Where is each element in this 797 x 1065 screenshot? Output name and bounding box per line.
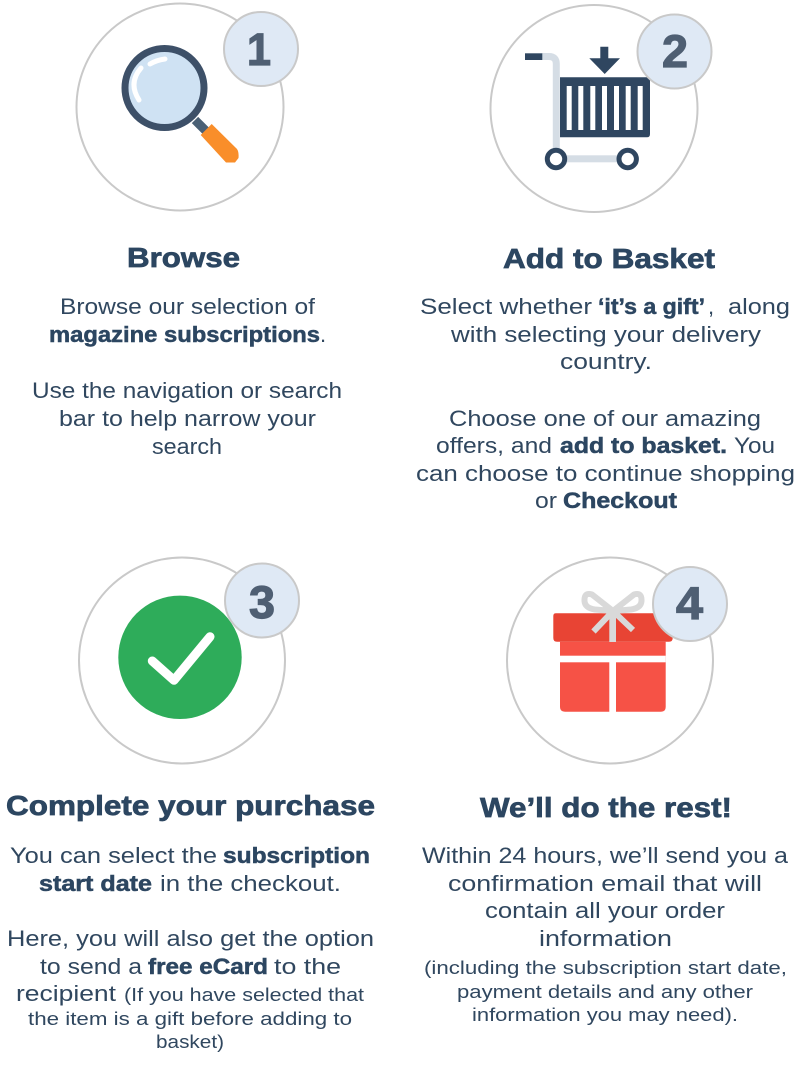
text block: browse description: Use the navigation or search: [32, 378, 342, 403]
text block: purchase description: free eCard: [148, 954, 268, 979]
step 4 circle: [507, 558, 713, 764]
heading: Add to Basket: Add to Basket: [503, 243, 715, 274]
text block: basket description: You: [734, 433, 775, 458]
step 2 circle: [490, 5, 698, 212]
text block: browse description: magazine subscriptions: [49, 322, 320, 347]
step 2 number badge: 2: [662, 26, 688, 77]
panel: step 4 we will do the rest: [422, 558, 789, 1025]
icon: gift box: [553, 594, 673, 712]
text block: final step description: Within 24 hours, we’ll send you a: [422, 843, 789, 868]
text block: purchase description: to send a: [40, 954, 143, 979]
icon: magnifying glass: [125, 48, 239, 162]
text block: purchase description: in the checkout.: [160, 871, 341, 896]
text block: basket description: along: [728, 294, 790, 319]
step 3 number badge: 3: [249, 577, 275, 628]
text block: purchase description: start date: [39, 871, 152, 896]
text block: basket description: ,: [708, 294, 714, 319]
text block: basket description: country.: [560, 349, 652, 374]
text block: purchase description: You can select the: [10, 843, 217, 868]
text block: purchase description: recipient: [16, 981, 116, 1006]
text block: final step description: information you may need).: [472, 1005, 738, 1025]
text block: final step description: confirmation email that will: [448, 871, 762, 896]
text block: purchase description: Here, you will also get the option: [7, 926, 374, 951]
text block: purchase description: subscription: [223, 843, 370, 868]
text block: basket description: Checkout: [563, 488, 678, 513]
text block: purchase description: basket): [156, 1032, 224, 1052]
step 4 number badge: [653, 567, 727, 641]
text block: browse description: .: [320, 322, 326, 347]
text block: browse description: bar to help narrow your: [59, 406, 316, 431]
text block: basket description: or: [535, 488, 557, 513]
heading: Complete your purchase: Complete your purchase: [6, 790, 375, 821]
step 1 circle: [76, 4, 284, 210]
step 1 number badge: [224, 12, 298, 86]
heading: Browse: Browse: [127, 242, 240, 273]
panel: step 2 add to basket: [416, 5, 795, 513]
text block: browse description: Browse our selection of: [60, 294, 316, 319]
text block: purchase description: [7, 843, 374, 1052]
step 3 number badge: [225, 564, 299, 638]
text block: basket description: with selecting your delivery: [450, 322, 761, 347]
text block: basket description: offers, and: [436, 433, 552, 458]
step 2 number badge: [638, 14, 712, 88]
text block: purchase description: (If you have selected that: [124, 985, 364, 1005]
text block: basket description: ‘it’s a gift’: [598, 294, 705, 319]
text block: browse description: [32, 294, 342, 459]
text block: final step description: [422, 843, 789, 1025]
text block: basket description: Select whether: [420, 294, 592, 319]
text block: final step description: contain all your order: [485, 898, 725, 923]
step 1 number badge: 1: [247, 24, 271, 75]
panel: step 3 complete your purchase: [6, 558, 375, 1052]
heading: We'll do the rest!: We’ll do the rest!: [480, 792, 732, 823]
text block: basket description: add to basket.: [560, 433, 727, 458]
text block: final step description: information: [539, 926, 672, 951]
text block: purchase description: the item is a gift before adding to: [28, 1009, 352, 1029]
panel: step 1 browse: [32, 4, 342, 459]
text block: basket description: can choose to continue shopping: [416, 461, 795, 486]
step 4 number badge: 4: [676, 578, 703, 629]
text block: final step description: (including the subscription start date,: [424, 958, 787, 978]
icon: green check mark: [118, 596, 242, 719]
step 3 circle: [79, 558, 285, 764]
text block: basket description: [416, 294, 795, 513]
text block: purchase description: to the: [274, 954, 341, 979]
text block: basket description: Choose one of our amazing: [449, 406, 761, 431]
text block: final step description: payment details and any other: [457, 982, 753, 1002]
icon: shopping cart: [525, 47, 650, 168]
text block: browse description: search: [152, 434, 222, 459]
